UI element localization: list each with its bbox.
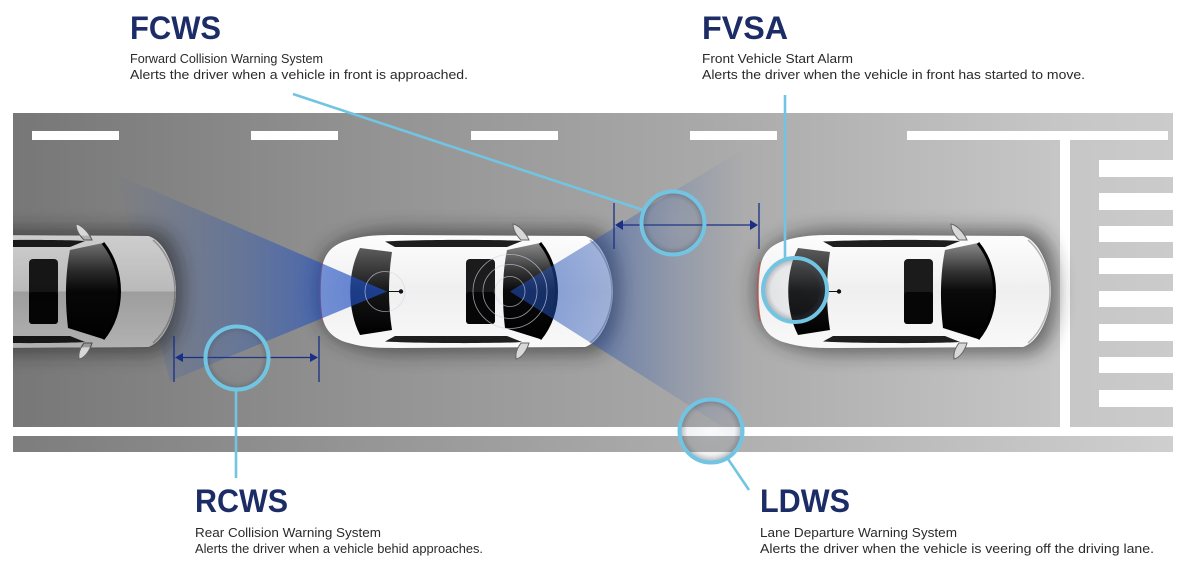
sensor arcs: [365, 254, 547, 328]
RCWS distance arrow: [174, 336, 319, 382]
LDWS callout line and circle: [680, 400, 749, 490]
LDWS label: Lane Departure Warning System: [760, 526, 957, 540]
RCWS label: Alerts the driver when a vehicle behid approaches.: [195, 542, 483, 556]
RCWS label: [195, 483, 483, 556]
FVSA callout line and circle: [763, 95, 827, 322]
front car with FVSA sensor: [754, 224, 1058, 359]
RCWS label: RCWS: [195, 483, 288, 519]
FCWS label: FCWS: [130, 10, 221, 46]
RCWS callout line and circle: [206, 326, 268, 478]
lane markings: [32, 131, 1168, 140]
centre car: [316, 224, 620, 359]
FVSA label: FVSA: [702, 10, 788, 46]
LDWS label: LDWS: [760, 483, 850, 519]
FCWS label: Forward Collision Warning System: [130, 52, 323, 66]
LDWS label: Alerts the driver when the vehicle is veering off the driving lane.: [760, 542, 1154, 556]
FCWS callout line and circle: [293, 94, 704, 254]
stop line and pedestrian crossing: [1060, 140, 1173, 427]
FCWS distance arrow: [614, 203, 759, 249]
rear car, cut off at left edge: [0, 224, 183, 359]
rear sensor cone: [115, 174, 387, 381]
FCWS label: Alerts the driver when a vehicle in front is approached.: [130, 68, 468, 82]
FCWS label: [130, 10, 468, 82]
LDWS label: [760, 483, 1154, 556]
FVSA label: [702, 10, 1085, 82]
FVSA label: Front Vehicle Start Alarm: [702, 52, 853, 66]
front sensor cone: [510, 148, 745, 427]
RCWS label: Rear Collision Warning System: [195, 526, 381, 540]
road surface: [13, 113, 1173, 452]
FVSA label: Alerts the driver when the vehicle in front has started to move.: [702, 68, 1085, 82]
